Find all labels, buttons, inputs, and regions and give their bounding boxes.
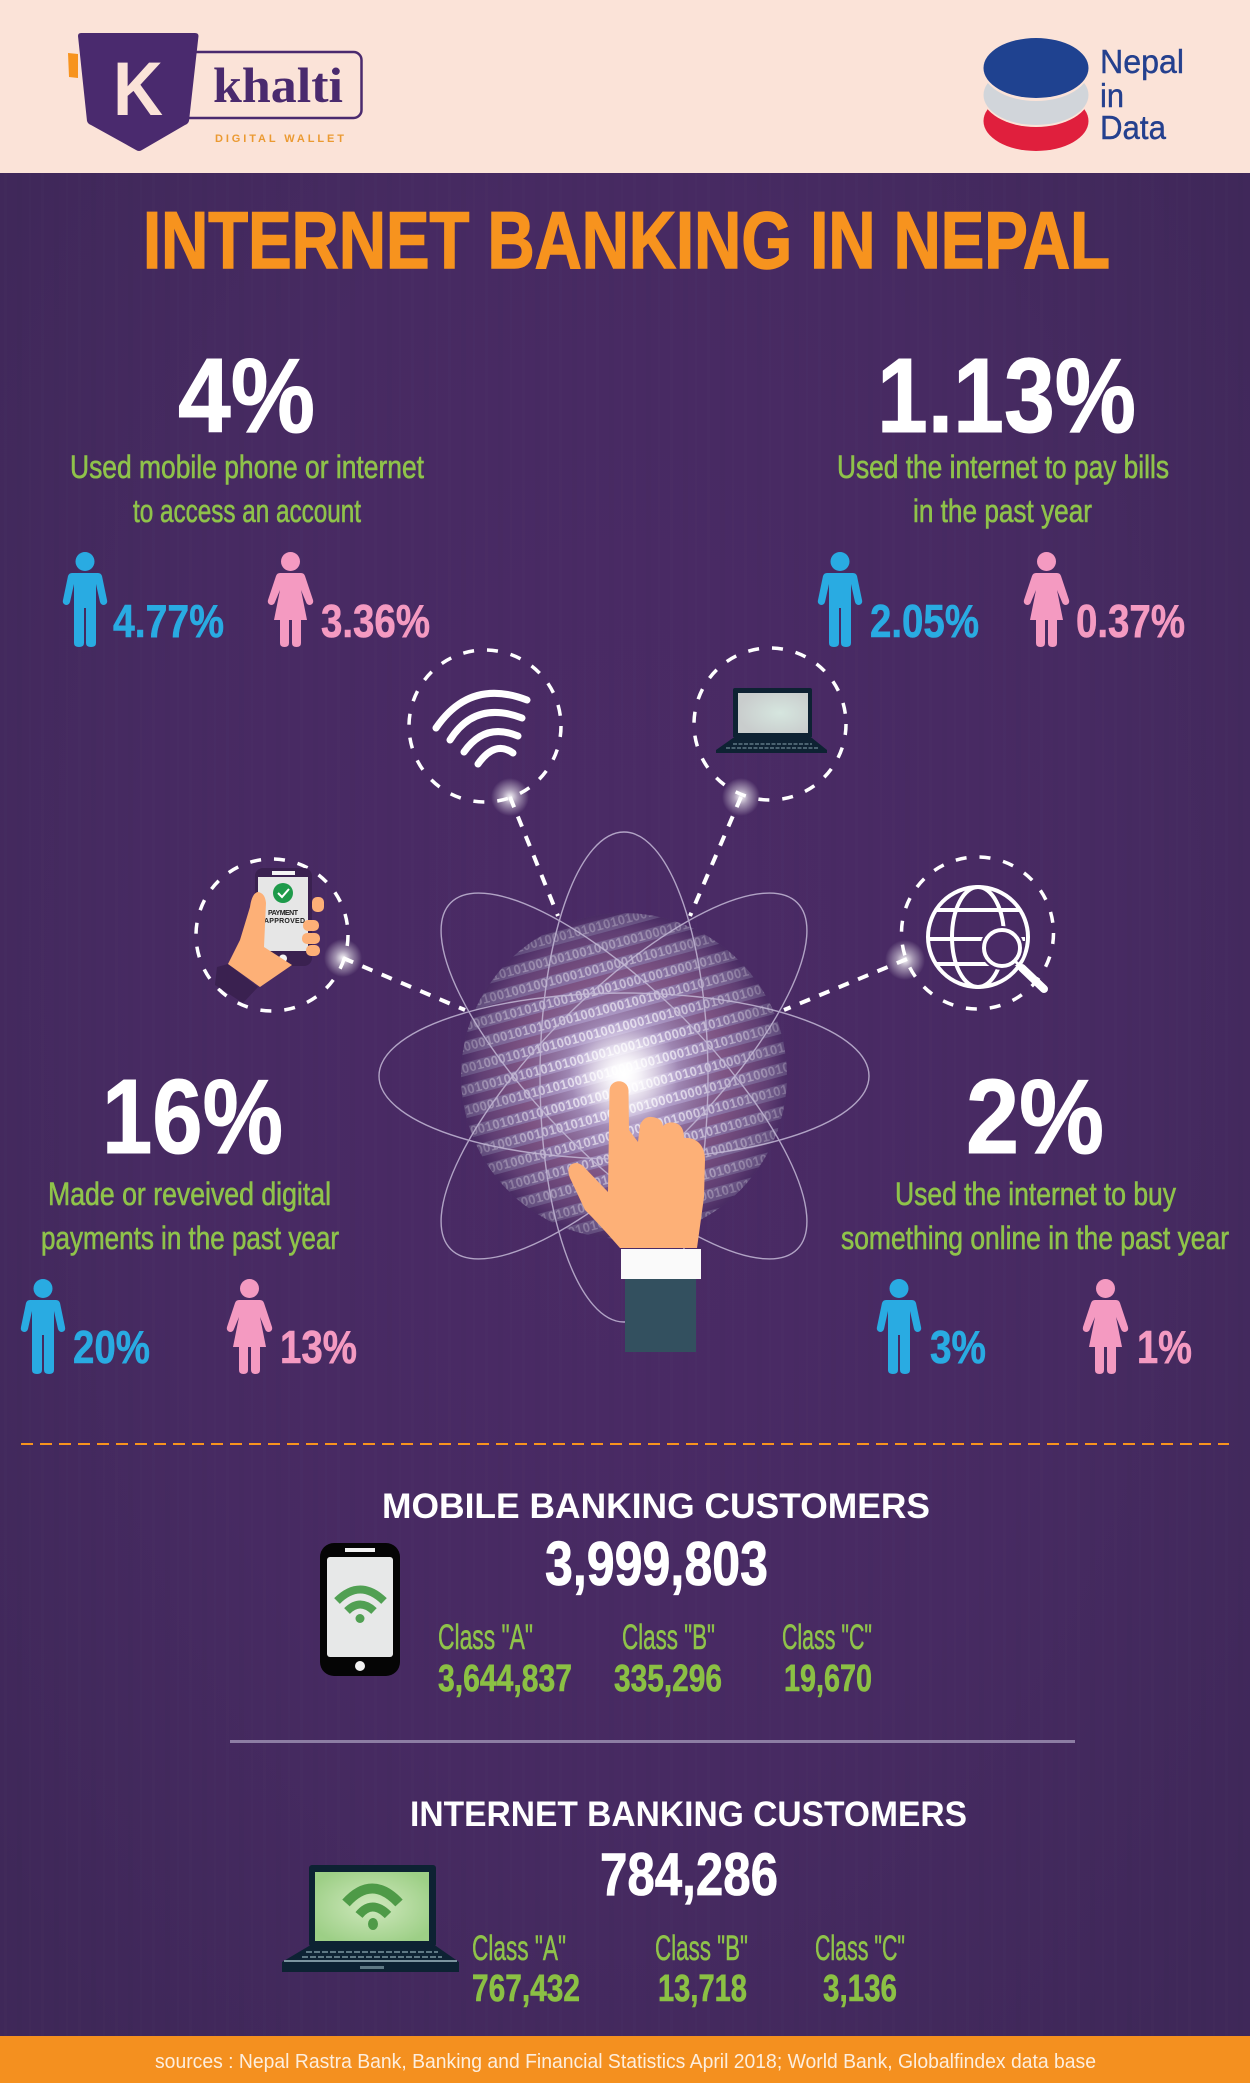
binary sphere: 100010010101010010010010001001000101010100100 — [424, 899, 756, 1001]
binary sphere: 100010010101010100100010001000101010100010010 — [477, 1098, 810, 1200]
panel: internet banking customers — [282, 1795, 967, 2010]
stat description: Used the internet to pay bills — [837, 449, 1169, 485]
male value: 2.05% — [870, 595, 979, 647]
class C: Class "C" — [815, 1929, 905, 1968]
binary sphere: 001000100101010100100100010010001010101001001 — [440, 958, 772, 1060]
class B: 335,296 — [614, 1658, 722, 1700]
binary sphere: 001001010101010010001001000101010100100100010 — [488, 1137, 820, 1240]
binary sphere: 100100010101010010010001001000101010101001001 — [493, 1157, 825, 1259]
stat description — [837, 449, 1169, 529]
stat description: Used the internet to buy — [895, 1176, 1176, 1212]
female icon — [268, 552, 313, 647]
class C — [815, 1929, 905, 2010]
class B — [655, 1929, 748, 2010]
binary sphere: 010010001010101001001001000100100010101010010 — [445, 978, 778, 1080]
central illustration: atom globe with touching hand — [379, 832, 869, 1352]
class B: Class "B" — [655, 1929, 748, 1968]
stat value: 4% — [178, 337, 315, 455]
stat description: Made or reveived digital — [48, 1176, 331, 1212]
female value: 1% — [1137, 1321, 1192, 1373]
binary sphere: 010100010010101010101001000100100010101010001 — [483, 1117, 815, 1219]
icon: phone payment approved in dashed circle: APPROVED — [264, 918, 305, 925]
panel: 1.13% used the internet to pay bills — [818, 337, 1185, 647]
class A — [472, 1929, 580, 2010]
logo: Khalti digital wallet: khalti — [213, 57, 343, 113]
female icon — [1083, 1279, 1128, 1374]
orbit rings — [379, 832, 869, 1322]
binary sphere: 010010001010101001001000100100010101010100010 — [499, 1177, 831, 1279]
stat description: Used mobile phone or internet — [70, 449, 424, 485]
total: 3,999,803 — [545, 1530, 768, 1599]
female icon — [227, 1279, 272, 1374]
sleeve — [215, 964, 258, 1003]
jacket sleeve — [625, 1279, 696, 1352]
shirt cuff — [621, 1249, 701, 1279]
heading: MOBILE BANKING CUSTOMERS — [382, 1487, 930, 1526]
binary sphere: 010001001010101001001000100100010101010010001 — [456, 1018, 788, 1120]
panel: 4% used mobile or internet to access an account — [63, 337, 430, 647]
panel: mobile banking customers — [320, 1487, 930, 1700]
footer sources bar: sources : Nepal Rastra Bank, Banking and Financial Statistics April 2018; World Bank, Globalfindex data base — [155, 2051, 1096, 2073]
female icon — [1024, 552, 1069, 647]
class C: Class "C" — [782, 1618, 872, 1657]
connector dashes to icons — [343, 797, 907, 1010]
stat description — [841, 1176, 1229, 1256]
class A: 767,432 — [472, 1968, 580, 2010]
male value: 20% — [73, 1321, 150, 1373]
logo: Nepal in Data: in — [1100, 77, 1124, 114]
icon: phone payment approved in dashed circle: PAYMENT — [268, 910, 299, 917]
class C: 3,136 — [823, 1968, 897, 2010]
class A — [438, 1618, 572, 1700]
icon: smartphone with wifi — [320, 1543, 400, 1676]
footer sources bar — [0, 2036, 1250, 2083]
stat value: 1.13% — [877, 337, 1136, 455]
logo: Khalti digital wallet: DIGITAL WALLET — [215, 133, 344, 145]
stat description — [70, 449, 424, 529]
class A: Class "A" — [438, 1618, 533, 1657]
class B: Class "B" — [622, 1618, 715, 1657]
stat description — [41, 1176, 339, 1256]
male icon — [877, 1279, 921, 1374]
male icon — [818, 552, 862, 647]
logo: Khalti digital wallet: K — [113, 47, 163, 132]
male value: 3% — [930, 1321, 986, 1373]
binary sphere: 100100010101010100100100100010010001010101000 — [435, 938, 767, 1041]
class A: 3,644,837 — [438, 1658, 572, 1700]
icon: phone payment approved in dashed circle — [196, 859, 362, 1011]
female value: 0.37% — [1076, 595, 1185, 647]
stat value: 16% — [102, 1058, 283, 1176]
stat description: to access an account — [133, 493, 361, 529]
stat value: 2% — [966, 1058, 1104, 1176]
class C — [782, 1618, 872, 1700]
binary sphere: 100101010101001001000100100010101010001001010 — [461, 1038, 794, 1140]
male icon — [63, 552, 107, 647]
logo: Nepal in Data: Nepal — [1100, 43, 1184, 80]
header band — [0, 0, 1250, 173]
stat description: payments in the past year — [41, 1220, 339, 1256]
binary sphere: 000100100101010101001000100010001010101000100 — [467, 1057, 799, 1160]
heading: INTERNET BANKING CUSTOMERS — [410, 1795, 967, 1834]
stat description: in the past year — [913, 493, 1092, 529]
logo: Nepal in Data — [982, 35, 1184, 151]
binary sphere: 010100100100010010001010101010010010001010010 — [419, 878, 751, 981]
hand pointing — [568, 1081, 705, 1248]
holding hand — [228, 892, 292, 987]
icon: wifi in dashed circle — [409, 650, 561, 816]
class B — [614, 1618, 722, 1700]
male icon — [21, 1279, 65, 1374]
male value: 4.77% — [113, 595, 224, 647]
phone — [255, 868, 312, 966]
icon: laptop with wifi — [282, 1865, 459, 1972]
class A: Class "A" — [472, 1929, 566, 1968]
icon: laptop in dashed circle — [694, 648, 846, 816]
female value: 3.36% — [321, 595, 430, 647]
logo: Nepal in Data: Data — [1100, 109, 1167, 146]
total: 784,286 — [600, 1841, 778, 1908]
icon: globe with magnifier in dashed circle — [885, 857, 1054, 1009]
class B: 13,718 — [658, 1968, 747, 2010]
binary sphere: 010101010010010010001001000101010100010010001 — [429, 918, 762, 1021]
female value: 13% — [280, 1321, 357, 1373]
binary sphere: 010010001010101010010001000100010101010010100 — [472, 1077, 804, 1180]
binary sphere: 100100100101010100100100010010001010101000100 — [451, 998, 783, 1101]
logo: Khalti digital wallet — [68, 33, 362, 151]
class C: 19,670 — [784, 1658, 872, 1700]
binary sphere — [461, 913, 787, 1238]
panel: 2% used the internet to buy something online — [841, 1058, 1229, 1374]
panel: 16% made or received digital payments — [21, 1058, 357, 1374]
